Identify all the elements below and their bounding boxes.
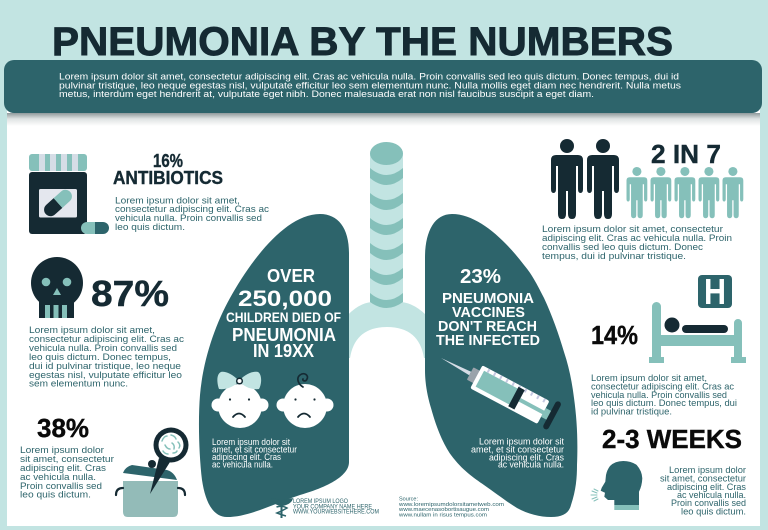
left lung headline: 250,000 bbox=[238, 286, 332, 311]
2-3 weeks body text: adipiscing elit. Cras bbox=[667, 481, 746, 492]
icon: five light people bbox=[626, 167, 743, 218]
2-3 weeks body text bbox=[660, 464, 746, 516]
right lung body text: amet, et sit consectetur bbox=[471, 444, 564, 454]
2-3 weeks body text: sit amet, consectetur bbox=[660, 472, 746, 484]
right lung body text: Lorem ipsum dolor sit bbox=[479, 436, 565, 446]
right lung body text: ac vehicula nulla. bbox=[498, 460, 564, 470]
2 in 7 body text: convallis sed leo quis dictum. Donec bbox=[542, 241, 703, 252]
stat: 16% antibiotics: ANTIBIOTICS bbox=[113, 168, 223, 188]
section: 87% bbox=[29, 257, 184, 388]
icon: caduceus bbox=[271, 497, 293, 518]
antibiotics body text: consectetur adipiscing elit. Cras ac bbox=[115, 203, 269, 214]
87% body text: Lorem ipsum dolor sit amet, bbox=[29, 324, 155, 335]
section: 14% bbox=[591, 271, 746, 416]
left lung headline: PNEUMONIA bbox=[232, 325, 336, 345]
2-3 weeks body text: Lorem ipsum dolor bbox=[669, 464, 746, 475]
left lung headline: CHILDREN DIED OF bbox=[226, 309, 341, 325]
38% body text: adipiscing elit. Cras bbox=[20, 462, 106, 473]
right lung panel bbox=[425, 214, 577, 517]
87% body text: vehicula nulla. Proin convallis sed bbox=[29, 342, 177, 353]
source list: www.nullam in risus tempus.com bbox=[398, 512, 487, 518]
antibiotics body text bbox=[115, 194, 269, 232]
38% body text: Lorem ipsum dolor bbox=[20, 444, 104, 455]
banner: intro text: Lorem ipsum dolor sit amet, consectetur adipiscing elit. Cras ac vehicula nulla. Proin convallis sed leo quis dictum. Donec tempus, dui id bbox=[59, 70, 679, 82]
left lung body text: ac vehicula nulla. bbox=[212, 460, 273, 470]
right lung headline: 23% bbox=[460, 266, 501, 288]
14% body text: leo quis dictum. Donec tempus, dui bbox=[591, 397, 737, 408]
banner: intro text: pulvinar tristique, leo neque egestas nisl, vulputate efficitur leo sem elementum nunc. Nulla mollis eget diam nec hendrerit. Nulla metus bbox=[59, 80, 681, 90]
right lung headline: THE INFECTED bbox=[436, 332, 540, 349]
logo text: YOUR COMPANY NAME HERE bbox=[293, 504, 373, 510]
stat: 16% antibiotics bbox=[113, 151, 223, 188]
section: antibiotics bbox=[29, 151, 269, 234]
87% body text: egestas nisl, vulputate efficitur leo bbox=[29, 369, 182, 380]
stat: 14%: 14% bbox=[591, 320, 638, 350]
38% body text: sit amet, consectetur bbox=[20, 453, 114, 464]
14% body text: consectetur adipiscing elit. Cras ac bbox=[591, 380, 734, 392]
icon: coughing head bbox=[591, 461, 642, 510]
right lung headline: VACCINES bbox=[452, 304, 525, 321]
87% body text: leo quis dictum. Donec tempus, bbox=[29, 351, 171, 362]
left lung body text: adipiscing elit. Cras bbox=[212, 452, 282, 462]
icon: hospital sign: H bbox=[704, 271, 726, 312]
right lung headline: PNEUMONIA bbox=[442, 290, 534, 307]
source list: www.maecenasobortisaugue.com bbox=[398, 507, 489, 513]
right lung headline: DON'T REACH bbox=[438, 318, 537, 335]
icon: pot with magnifier bbox=[116, 428, 188, 517]
left lung body text: amet, et sit consectetur bbox=[212, 444, 297, 454]
left lung body text: Lorem ipsum dolor sit bbox=[212, 437, 291, 447]
2-3 weeks body text: ac vehicula nulla. bbox=[677, 489, 746, 500]
logo text: WWW.YOURWEBSITEHERE.COM bbox=[293, 508, 379, 516]
icon: syringe bbox=[434, 343, 562, 430]
antibiotics body text: vehicula nulla. Proin convallis sed bbox=[115, 212, 262, 223]
87% body text bbox=[29, 324, 184, 388]
icon: hospital bed bbox=[649, 302, 746, 363]
lungs illustration: trachea and bronchi bbox=[345, 142, 429, 358]
icon: baby boy bbox=[276, 374, 334, 428]
icon: skull bbox=[31, 257, 83, 318]
left lung headline: IN 19XX bbox=[253, 341, 314, 361]
title: PNEUMONIA BY THE NUMBERS bbox=[52, 20, 673, 64]
38% body text: Proin convallis sed bbox=[20, 480, 102, 491]
icon: two dark people bbox=[551, 139, 619, 219]
icon: baby girl bbox=[212, 372, 268, 428]
14% body text: vehicula nulla. Proin convallis sed bbox=[591, 389, 727, 400]
section: 2-3 weeks bbox=[591, 424, 746, 516]
antibiotics body text: Lorem ipsum dolor sit amet, bbox=[115, 194, 240, 206]
icon: pill jar bbox=[29, 154, 109, 234]
stat: 87%: 87% bbox=[91, 273, 169, 314]
14% body text: id pulvinar tristique. bbox=[591, 406, 672, 416]
left lung body text bbox=[212, 437, 297, 470]
2 in 7 body text bbox=[542, 223, 732, 261]
stat: 2 in 7: 2 IN 7 bbox=[651, 139, 721, 169]
logo text: LOREM IPSUM LOGO bbox=[293, 498, 348, 505]
banner: intro text: metus, interdum eget hendrerit at, vulputate eget nibh. Donec malesuada erat non nisl faucibus suscipit a eget diam. bbox=[59, 88, 594, 99]
left lung panel bbox=[199, 214, 349, 517]
stat: 2-3 weeks: 2-3 WEEKS bbox=[602, 424, 742, 454]
source list bbox=[398, 496, 504, 518]
right lung body text bbox=[471, 436, 565, 470]
14% body text bbox=[591, 372, 737, 416]
right lung body text: adipiscing elit. Cras bbox=[489, 452, 565, 462]
2-3 weeks body text: leo quis dictum. bbox=[681, 506, 746, 516]
87% body text: consectetur adipiscing elit. Cras ac bbox=[29, 333, 184, 344]
2 in 7 body text: tempus, dui id pulvinar tristique. bbox=[542, 250, 686, 261]
white content panel bbox=[7, 100, 760, 526]
right lung headline bbox=[436, 266, 540, 349]
2-3 weeks body text: Proin convallis sed bbox=[671, 497, 746, 508]
source list: Source: bbox=[399, 496, 418, 502]
2 in 7 body text: Lorem ipsum dolor sit amet, consectetur bbox=[542, 223, 723, 234]
source list: www.loremipsumdolorsitametweb.com bbox=[398, 502, 504, 508]
stat: 38%: 38% bbox=[37, 413, 89, 443]
14% body text: Lorem ipsum dolor sit amet, bbox=[591, 372, 707, 383]
38% body text bbox=[20, 444, 114, 500]
section: 38% bbox=[20, 413, 188, 517]
antibiotics body text: leo quis dictum. bbox=[115, 221, 185, 232]
left lung headline bbox=[226, 266, 341, 361]
stat: 16% antibiotics: 16% bbox=[153, 151, 183, 171]
87% body text: sem elementum nunc. bbox=[29, 378, 128, 388]
38% body text: leo quis dictum. bbox=[20, 488, 91, 500]
logo text bbox=[293, 498, 379, 516]
38% body text: ac vehicula nulla. bbox=[20, 471, 96, 482]
logo block bbox=[271, 497, 379, 518]
section: 2 in 7 bbox=[542, 139, 743, 261]
2 in 7 body text: adipiscing elit. Cras ac vehicula nulla. Proin bbox=[542, 232, 732, 243]
87% body text: dui id pulvinar tristique, leo neque bbox=[29, 360, 181, 371]
banner: intro text bbox=[4, 60, 762, 113]
left lung headline: OVER bbox=[267, 266, 315, 286]
